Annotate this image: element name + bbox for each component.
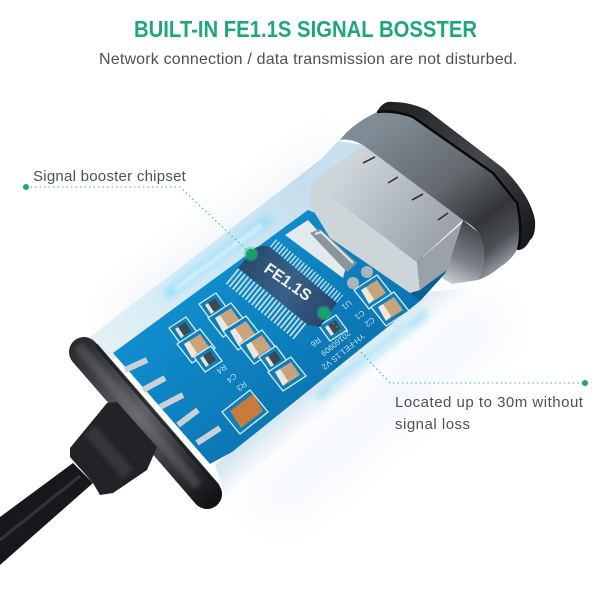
label: range: Located up to 30m without [395,394,583,411]
silkscreen: R4 [214,362,228,376]
silkscreen: C3 [390,317,404,331]
callout line: chipset [26,187,251,254]
RJ45 socket [310,145,463,293]
silkscreen: C1 [352,308,366,322]
FE1.1S chip [238,246,337,327]
silkscreen: C4 [224,371,238,385]
socket window and crystal [285,220,373,289]
silkscreen: U1 [339,298,353,312]
large tantalum [222,390,268,434]
tube glow bands [165,218,427,397]
right cap groove [377,112,520,250]
silkscreen: YH-FE1.1S V2 [320,331,366,372]
glass tube lower wall [215,288,472,495]
label: range [395,394,583,433]
callout line: range [324,313,583,383]
silkscreen: R6 [308,335,322,349]
label: signal booster chipset: Signal booster chipset [33,168,186,185]
callout dot: range [582,380,588,386]
edge pins [125,360,220,443]
glass tube upper wall [90,147,345,360]
silkscreen: C2 [362,315,376,329]
label: range: signal loss [395,416,471,433]
circuit board [113,210,450,464]
callout dot: chipset [23,184,29,190]
tinted opening behind socket [300,141,365,183]
cable [0,463,93,565]
silkscreen: R3 [234,379,248,393]
left cap and strain relief [70,345,218,495]
chip pins [232,243,340,333]
soft halo below tube [240,290,510,520]
right cap body [340,111,523,280]
SMD components [199,293,227,319]
chip label: FE1.1S [261,260,314,305]
right cap inner wall [442,220,484,284]
subtitle: Network connection / data transmission are not disturbed. [99,51,517,68]
right cap rim [377,102,535,250]
title: BUILT-IN FE1.1S SIGNAL BOSSTER [134,16,477,42]
silkscreen: 20160909 [319,328,352,358]
soft halo above tube [110,140,340,340]
silkscreen [214,298,404,393]
